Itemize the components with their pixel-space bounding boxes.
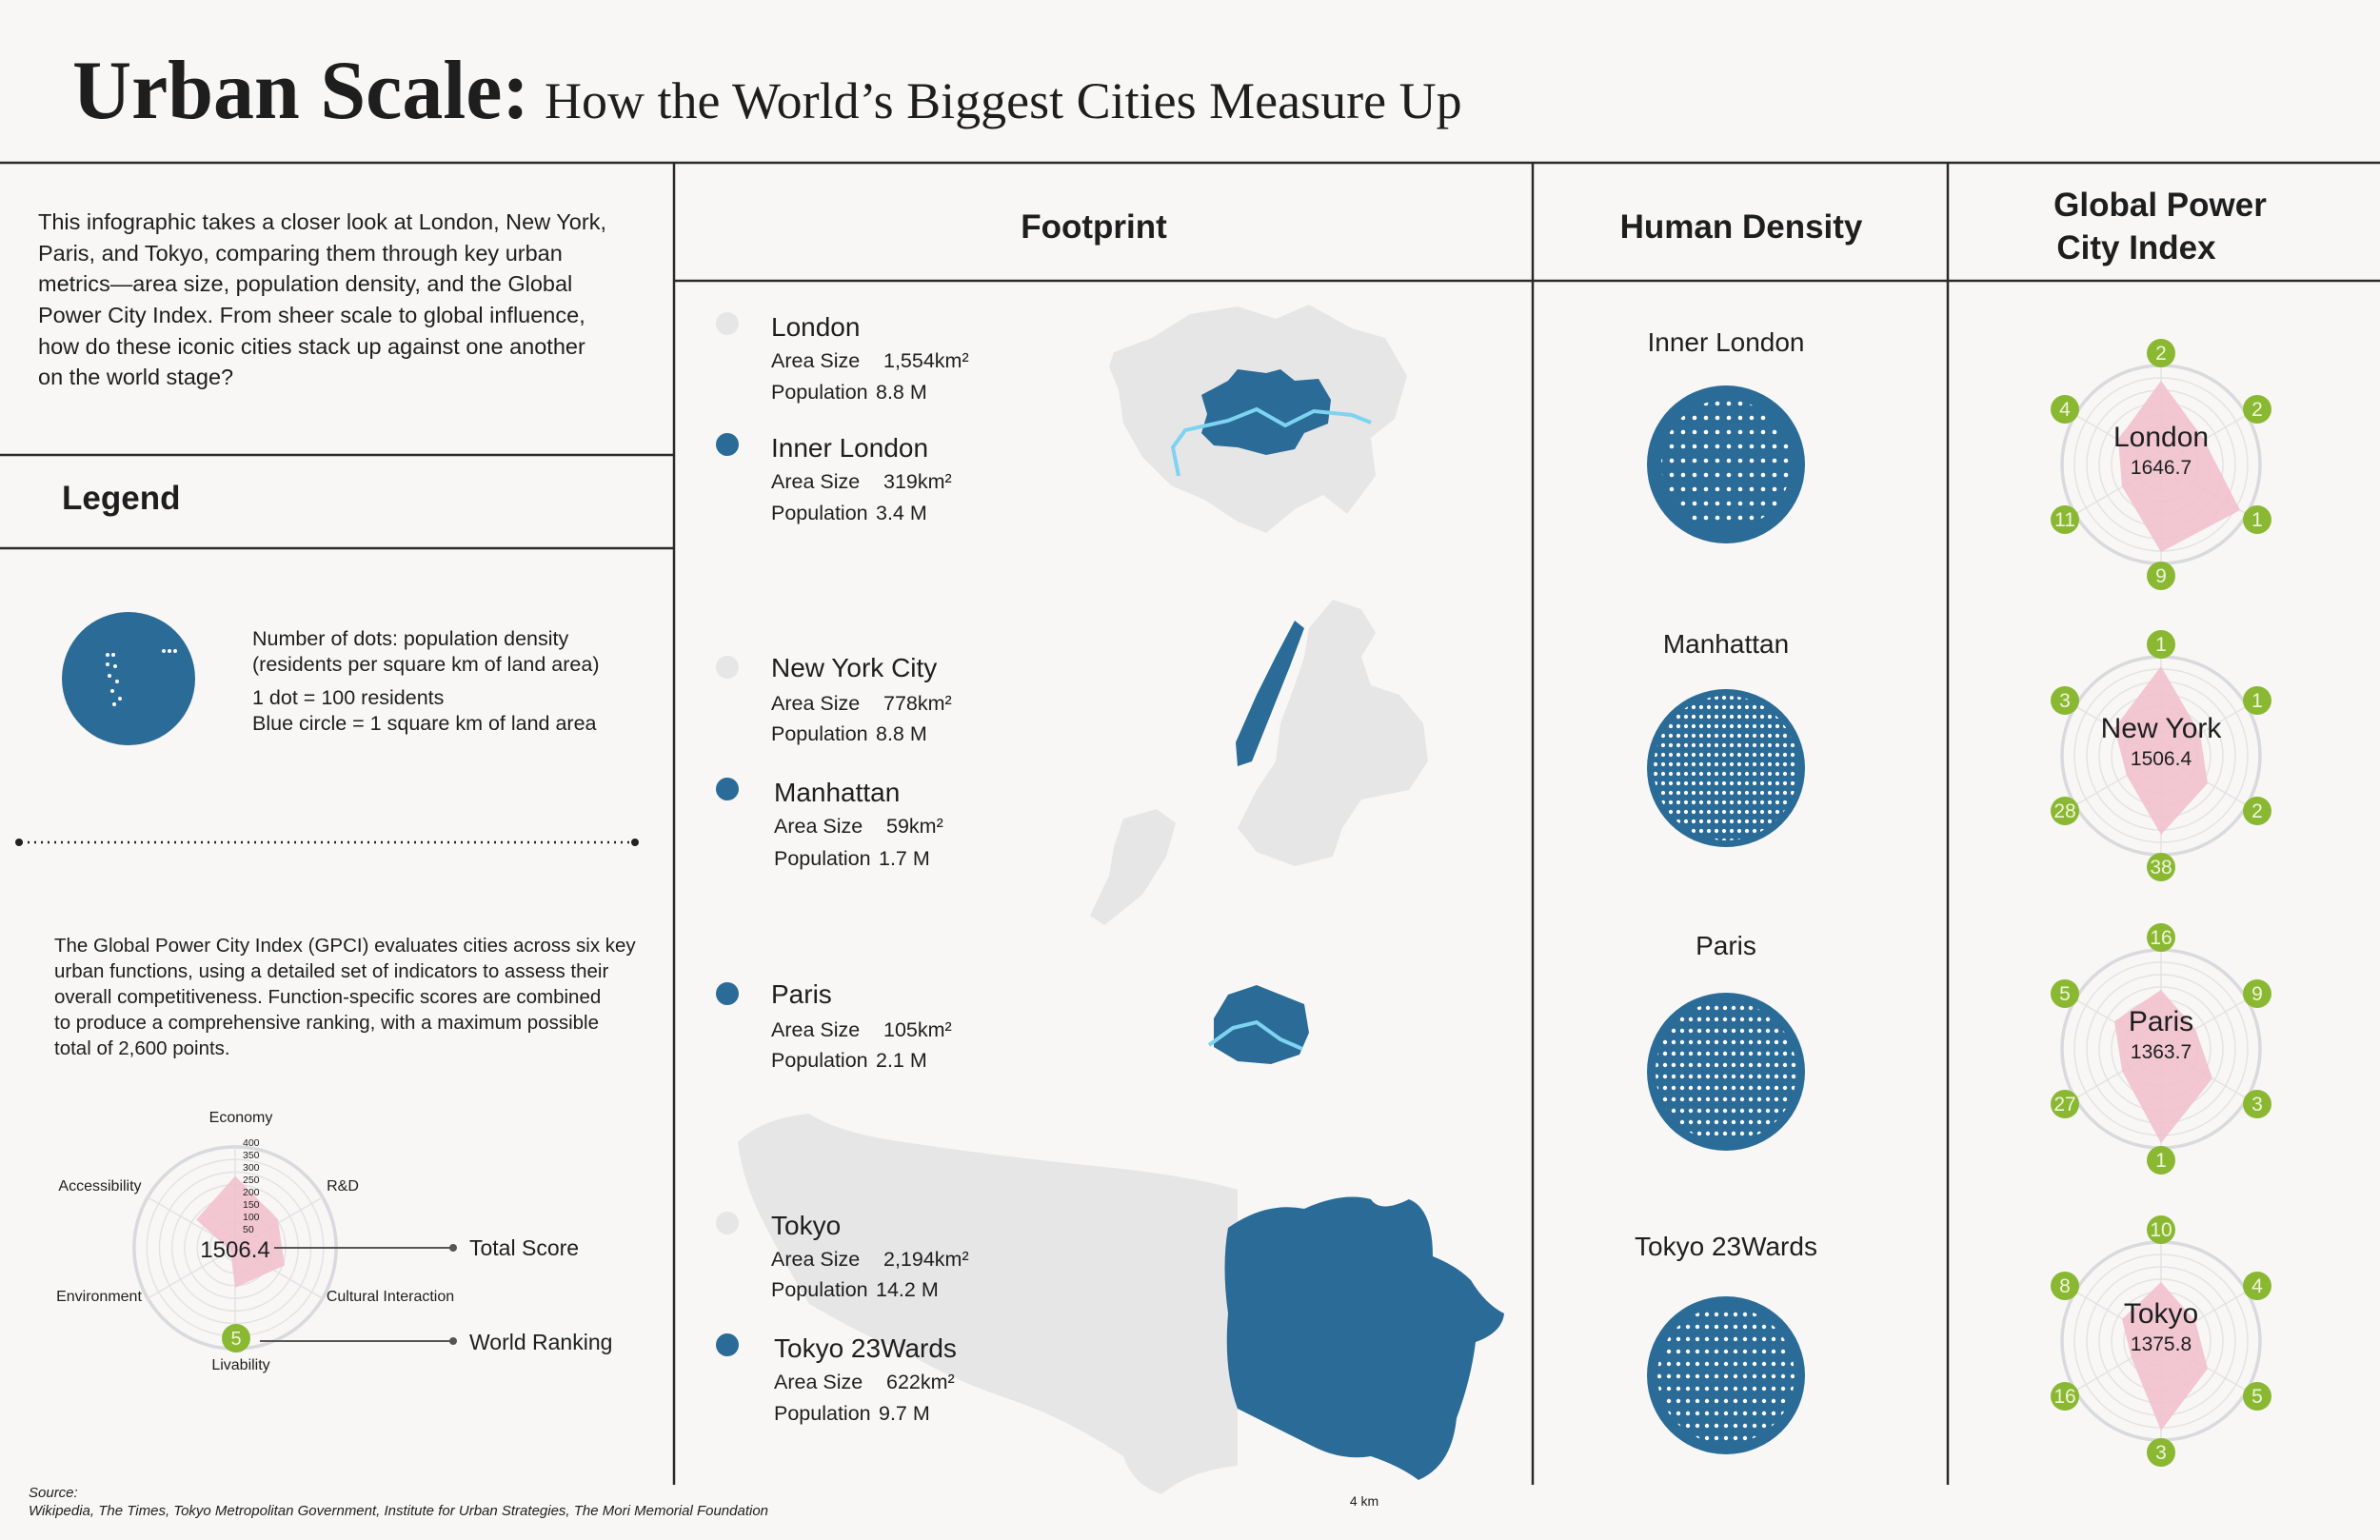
title: Urban Scale: (72, 45, 529, 137)
radar: London: 2 (2251, 399, 2263, 421)
radar: Paris: 1363.7 (2131, 1041, 2192, 1063)
footprint labels: 2,194km² (883, 1248, 969, 1271)
footprint labels: 2.1 M (876, 1049, 927, 1072)
footprint labels: 8.8 M (876, 722, 927, 745)
legend text: (residents per square km of land area) (252, 653, 599, 676)
legend radar chart: Environment (56, 1289, 142, 1305)
footprint labels: Inner London (771, 433, 928, 463)
radar: Tokyo (2051, 1215, 2271, 1467)
footprint labels: Tokyo 23Wards (774, 1333, 957, 1363)
title: How the World’s Biggest Cities Measure Up (545, 72, 1462, 129)
radar: Tokyo: Tokyo (2124, 1298, 2198, 1330)
source (29, 1485, 768, 1519)
human density (1635, 327, 1817, 1454)
map: Tokyo (738, 1114, 1504, 1494)
legend radar chart: 50 (243, 1224, 254, 1235)
radar: Paris: 1 (2155, 1150, 2167, 1172)
footprint labels: 105km² (883, 1018, 952, 1041)
radar: Paris: 9 (2251, 983, 2263, 1005)
footprint labels: 1.7 M (879, 847, 930, 870)
footprint labels: Area Size (771, 349, 860, 372)
legend radar chart: 350 (243, 1150, 260, 1161)
legend radar chart: Accessibility (58, 1178, 142, 1194)
footprint labels: Population (771, 502, 868, 524)
intro text: This infographic takes a closer look at London, New York, (38, 209, 606, 234)
column headers: Global Power (2053, 187, 2267, 224)
intro text (38, 209, 606, 389)
radar: Tokyo: 3 (2155, 1442, 2167, 1464)
GPCI description: overall competitiveness. Function-specific scores are combined (54, 986, 601, 1008)
footprint labels: Paris (771, 979, 832, 1009)
GPCI description (54, 935, 636, 1059)
radar: Tokyo: 1375.8 (2131, 1333, 2192, 1355)
footprint labels: 778km² (883, 692, 952, 715)
radar: London: 4 (2059, 399, 2071, 421)
legend radar chart (56, 1110, 612, 1373)
source: Wikipedia, The Times, Tokyo Metropolitan Government, Institute for Urban Strategies, The Mori Memorial Foundation (29, 1503, 768, 1519)
legend radar chart: Total Score (469, 1235, 579, 1260)
radar: Paris: 16 (2150, 927, 2172, 949)
radar: New York: 1 (2155, 634, 2167, 656)
footprint labels: Population (771, 1049, 868, 1072)
legend radar chart: 400 (243, 1137, 260, 1149)
GPCI description: to produce a comprehensive ranking, with a maximum possible (54, 1012, 599, 1034)
legend radar chart: 300 (243, 1162, 260, 1174)
column headers: City Index (2056, 229, 2216, 267)
radar: Tokyo: 8 (2059, 1275, 2071, 1297)
legend heading: Legend (62, 480, 180, 517)
radar: London (2051, 339, 2271, 590)
intro text: Paris, and Tokyo, comparing them through key urban (38, 241, 563, 266)
legend radar chart: Livability (211, 1357, 270, 1373)
footprint labels: Population (771, 1278, 868, 1301)
map: New York (1090, 600, 1428, 925)
radar: New York: 3 (2059, 690, 2071, 712)
footprint labels: Area Size (774, 815, 863, 838)
radar: London: 2 (2155, 343, 2167, 365)
footprint labels (716, 312, 969, 1425)
radar: Tokyo: 10 (2150, 1219, 2172, 1241)
intro text: Power City Index. From sheer scale to global influence, (38, 303, 585, 327)
radar: New York: 1506.4 (2131, 748, 2192, 770)
footprint labels: Area Size (771, 1248, 860, 1271)
footprint labels: 8.8 M (876, 381, 927, 404)
human density: Tokyo 23Wards (1635, 1232, 1817, 1261)
footprint labels: London (771, 312, 860, 342)
radar: New York: 28 (2053, 800, 2076, 822)
radar: New York: New York (2101, 713, 2222, 744)
legend radar chart: R&D (327, 1178, 359, 1194)
human density: Paris (1696, 931, 1756, 960)
source: Source: (29, 1485, 78, 1501)
legend radar chart: Cultural Interaction (327, 1289, 454, 1305)
radar: Paris: 5 (2059, 983, 2071, 1005)
radar: Paris (2051, 923, 2271, 1175)
human density: Inner London (1647, 327, 1805, 357)
footprint labels: 14.2 M (876, 1278, 939, 1301)
radar: Tokyo: 16 (2053, 1386, 2076, 1408)
radar: New York (2051, 630, 2271, 881)
radar: New York: 1 (2251, 690, 2263, 712)
legend radar chart: 150 (243, 1199, 260, 1211)
text: 4 km (1350, 1493, 1378, 1509)
footprint labels: Tokyo (771, 1211, 841, 1240)
legend text (252, 627, 599, 735)
footprint labels: 9.7 M (879, 1402, 930, 1425)
footprint labels: Population (771, 381, 868, 404)
footprint labels: Population (774, 1402, 871, 1425)
footprint labels: 3.4 M (876, 502, 927, 524)
footprint labels: 59km² (886, 815, 943, 838)
legend radar chart: World Ranking (469, 1330, 612, 1354)
legend text: Blue circle = 1 square km of land area (252, 712, 597, 735)
footprint labels: Population (771, 722, 868, 745)
legend radar chart: Economy (209, 1110, 272, 1126)
radar: New York: 38 (2150, 857, 2172, 879)
footprint labels: Manhattan (774, 778, 900, 807)
legend radar chart: 250 (243, 1175, 260, 1186)
radar: Paris: 3 (2251, 1094, 2263, 1116)
footprint labels: New York City (771, 653, 937, 682)
legend text: Number of dots: population density (252, 627, 569, 650)
title (72, 45, 1462, 137)
map: Paris (1209, 985, 1309, 1064)
GPCI description: total of 2,600 points. (54, 1037, 230, 1059)
legend: dot circle (62, 612, 195, 745)
GPCI description: The Global Power City Index (GPCI) evaluates cities across six key (54, 935, 636, 957)
radar: Tokyo: 4 (2251, 1275, 2263, 1297)
radar: London: 1 (2251, 509, 2263, 531)
footprint labels: Area Size (771, 470, 860, 493)
legend radar chart: 200 (243, 1187, 260, 1198)
intro text: metrics—area size, population density, and the Global (38, 271, 572, 296)
intro text: on the world stage? (38, 365, 233, 389)
column headers (1021, 187, 2267, 267)
footprint labels: Population (774, 847, 871, 870)
legend radar chart: 1506.4 (200, 1237, 270, 1263)
map: London (1109, 305, 1407, 533)
radar: London: 11 (2054, 509, 2075, 531)
footprint labels: 622km² (886, 1371, 955, 1393)
radar: London: 1646.7 (2131, 457, 2192, 479)
column headers: Human Density (1620, 208, 1863, 246)
footprint labels: Area Size (771, 1018, 860, 1041)
human density: Manhattan (1663, 629, 1789, 659)
footprint labels: Area Size (771, 692, 860, 715)
legend radar chart: 5 (230, 1329, 242, 1350)
legend text: 1 dot = 100 residents (252, 686, 444, 709)
radar: London: 9 (2155, 565, 2167, 587)
radar: Paris: Paris (2129, 1006, 2193, 1037)
radar: New York: 2 (2251, 800, 2263, 822)
footprint labels: 1,554km² (883, 349, 969, 372)
intro text: how do these iconic cities stack up against one another (38, 334, 585, 359)
radar: London: London (2113, 422, 2209, 453)
column headers: Footprint (1021, 208, 1167, 246)
footprint labels: Area Size (774, 1371, 863, 1393)
GPCI description: urban functions, using a detailed set of indicators to assess their (54, 960, 608, 982)
radar: Tokyo: 5 (2251, 1386, 2263, 1408)
footprint labels: 319km² (883, 470, 952, 493)
legend radar chart: 100 (243, 1212, 260, 1223)
radar: Paris: 27 (2053, 1094, 2076, 1116)
